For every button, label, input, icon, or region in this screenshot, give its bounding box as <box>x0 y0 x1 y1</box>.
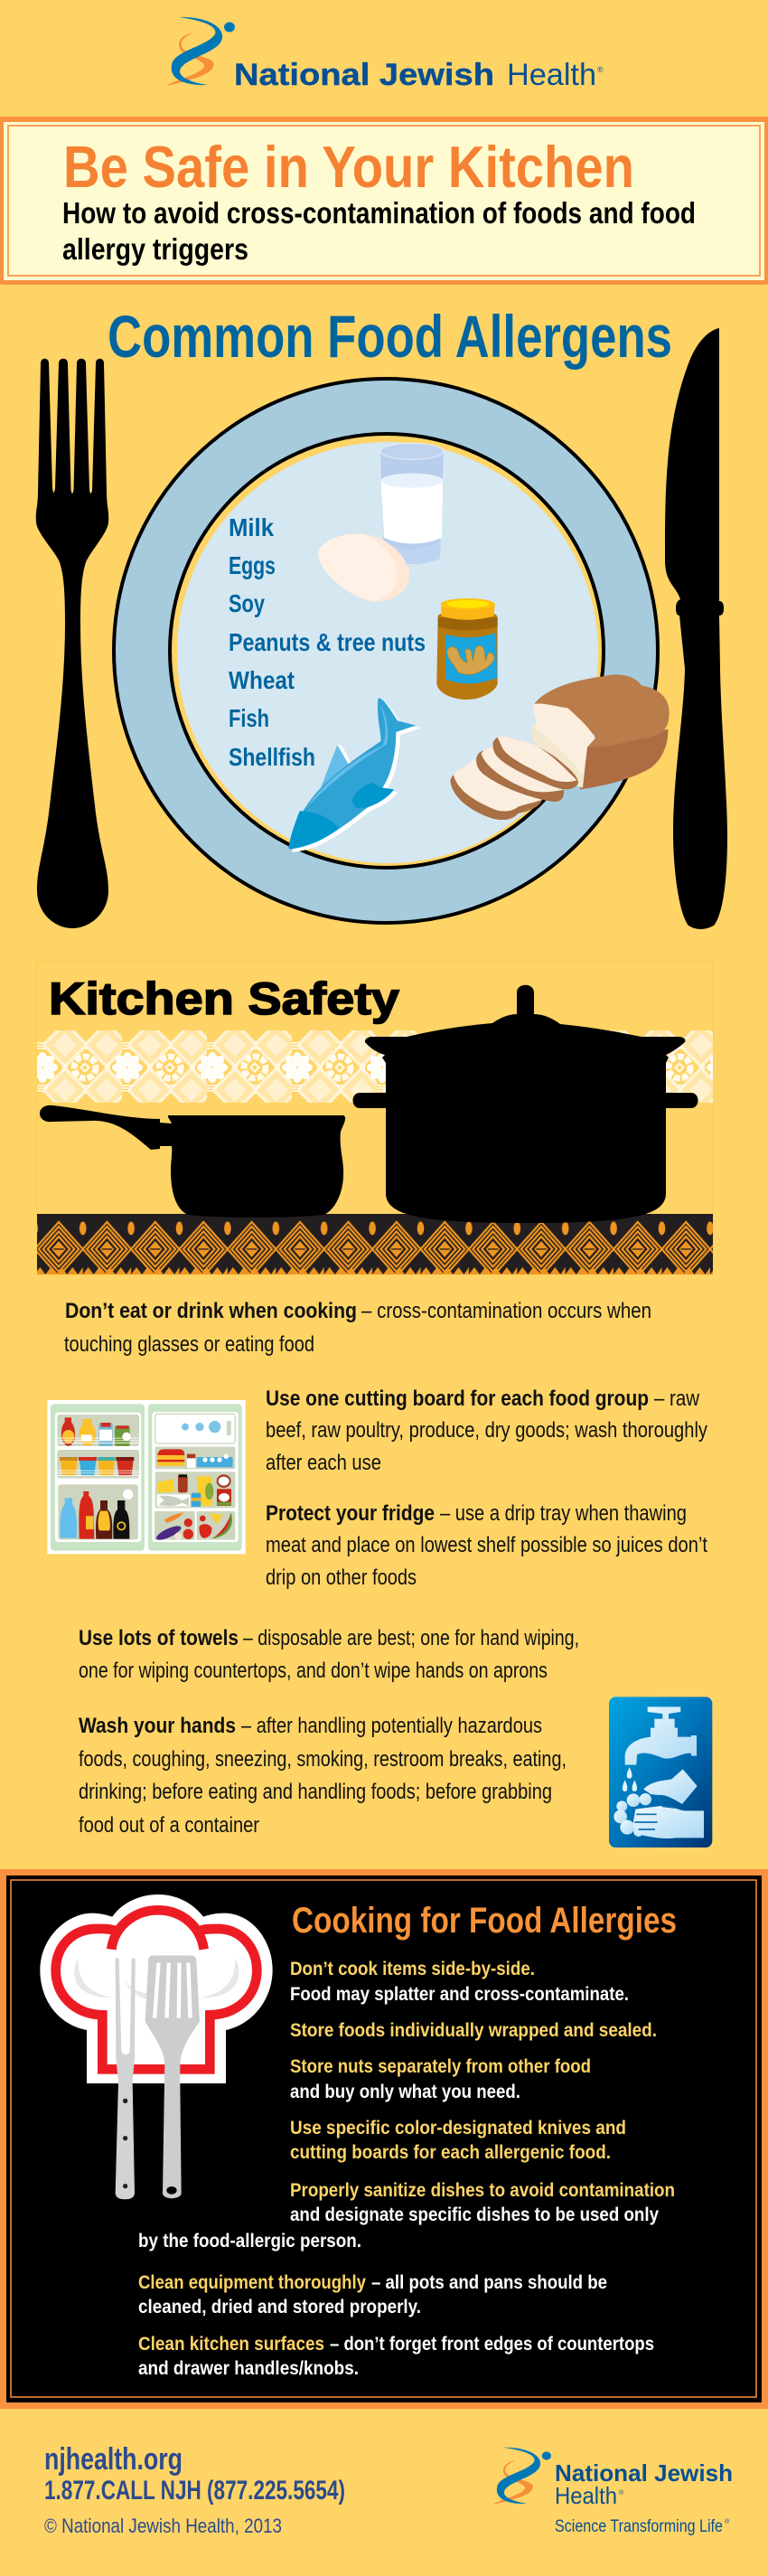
logo: National Jewish Health: Health <box>507 58 596 92</box>
list: common allergens: Wheat <box>229 666 295 694</box>
footer: contact details <box>44 2442 345 2537</box>
tips list: – don’t forget front edges of countertops <box>330 2333 654 2355</box>
tip: wash your hands: food out of a container <box>79 1813 259 1838</box>
tips list: Use specific color-designated knives and <box>290 2117 626 2139</box>
tips list: Properly sanitize dishes to avoid contamination <box>290 2179 675 2201</box>
tip: cutting board: after each use <box>266 1451 381 1475</box>
panel: Cooking for Food Allergies <box>0 1869 768 2409</box>
footer logo <box>492 2448 733 2536</box>
icon: saucepan silhouette <box>40 1105 345 1217</box>
icon: chef hat with utensils <box>40 1894 273 2199</box>
tips list: cutting boards for each allergenic food. <box>290 2141 611 2163</box>
tips list: Clean kitchen surfaces <box>138 2333 324 2355</box>
list: common allergens: Shellfish <box>229 743 315 771</box>
tips list <box>138 1958 675 2379</box>
heading: Kitchen Safety: Kitchen Safety <box>49 973 399 1024</box>
heading: Cooking for Food Allergies: Cooking for Food Allergies <box>292 1901 677 1941</box>
tip: towels <box>79 1626 579 1683</box>
tip: protect your fridge: – use a drip tray when thawing <box>440 1501 687 1526</box>
title: Be Safe in Your Kitchen <box>63 134 634 200</box>
tip: protect your fridge: Protect your fridge <box>266 1501 435 1526</box>
tip: towels: one for wiping countertops, and don’t wipe hands on aprons <box>79 1659 548 1683</box>
icon: fish <box>288 698 420 852</box>
panel: Kitchen Safety banner <box>37 961 713 1274</box>
tips list: by the food-allergic person. <box>138 2230 361 2252</box>
decorative orange weave band <box>37 1214 713 1274</box>
icon: fork silhouette <box>36 359 108 928</box>
tip: don't eat or drink: touching glasses or eating food <box>64 1332 314 1357</box>
tip: cutting board <box>266 1387 707 1475</box>
icon: glass of milk <box>380 443 444 564</box>
tip: don't eat or drink: – cross-contamination occurs when <box>361 1299 651 1323</box>
tips list: – all pots and pans should be <box>371 2271 607 2293</box>
logo: National Jewish Health <box>166 17 604 92</box>
tip: cutting board: Use one cutting board for each food group <box>266 1387 649 1411</box>
icon: peanut butter jar <box>436 598 498 700</box>
tip: wash your hands: Wash your hands <box>79 1714 236 1738</box>
tip: wash your hands <box>79 1714 567 1838</box>
tip: towels: Use lots of towels <box>79 1626 239 1650</box>
tip: wash your hands: foods, coughing, sneezing, smoking, restroom breaks, eating, <box>79 1747 567 1772</box>
footer logo: ® <box>725 2518 730 2525</box>
tip: towels: – disposable are best; one for hand wiping, <box>243 1626 579 1650</box>
panel: plate <box>114 379 670 923</box>
list: common allergens: Milk <box>229 513 274 541</box>
tips list: cleaned, dried and stored properly. <box>138 2296 421 2317</box>
tips list: and designate specific dishes to be used only <box>290 2204 659 2225</box>
tips list: Don’t cook items side-by-side. <box>290 1958 535 1979</box>
logo: National Jewish Health: National Jewish <box>234 58 494 92</box>
text block: kitchen safety tips <box>64 1299 707 1838</box>
list: common allergens: Peanuts & tree nuts <box>229 628 426 656</box>
footer: contact details: © National Jewish Health, 2013 <box>44 2515 282 2537</box>
footer: contact details: 1.877.CALL NJH (877.225.5654) <box>44 2476 345 2505</box>
tip: cutting board: – raw <box>654 1387 700 1411</box>
footer logo: ® <box>619 2489 624 2496</box>
list: common allergens: Soy <box>229 589 265 617</box>
tips list: and drawer handles/knobs. <box>138 2357 359 2379</box>
list: common allergens: Fish <box>229 704 269 732</box>
tips list: Store nuts separately from other food <box>290 2055 591 2077</box>
tips list: and buy only what you need. <box>290 2081 520 2102</box>
panel: title banner <box>0 117 768 285</box>
footer logo: Health <box>555 2482 617 2509</box>
tips list: Food may splatter and cross-contaminate. <box>290 1983 629 2005</box>
footer: contact details: njhealth.org <box>44 2442 183 2477</box>
tip: don't eat or drink: Don’t eat or drink when cooking <box>65 1299 357 1323</box>
tips list: Clean equipment thoroughly <box>138 2271 366 2293</box>
tip: protect your fridge <box>266 1501 707 1590</box>
icon: knife silhouette <box>665 328 727 929</box>
icon: hand washing sign <box>609 1697 712 1847</box>
list: common allergens <box>229 513 426 771</box>
footer logo: National Jewish <box>555 2459 733 2487</box>
subtitle <box>62 196 696 266</box>
tip: protect your fridge: drip on other foods <box>266 1565 417 1590</box>
tips list: Store foods individually wrapped and sealed. <box>290 2019 657 2041</box>
icon: egg <box>318 534 409 602</box>
icon: open refrigerator <box>47 1400 246 1554</box>
tip: don't eat or drink <box>64 1299 651 1357</box>
icon: stock pot silhouette <box>352 985 698 1223</box>
logo: National Jewish Health: ® <box>597 65 604 74</box>
subtitle: allergy triggers <box>62 232 248 266</box>
tip: wash your hands: drinking; before eating and handling foods; before grabbing <box>79 1780 552 1804</box>
list: common allergens: Eggs <box>229 551 276 579</box>
tip: wash your hands: – after handling potentially hazardous <box>241 1714 542 1738</box>
footer logo: Science Transforming Life <box>555 2517 723 2536</box>
decorative white lace band <box>37 1030 713 1103</box>
icon: sliced bread loaf <box>450 674 670 820</box>
